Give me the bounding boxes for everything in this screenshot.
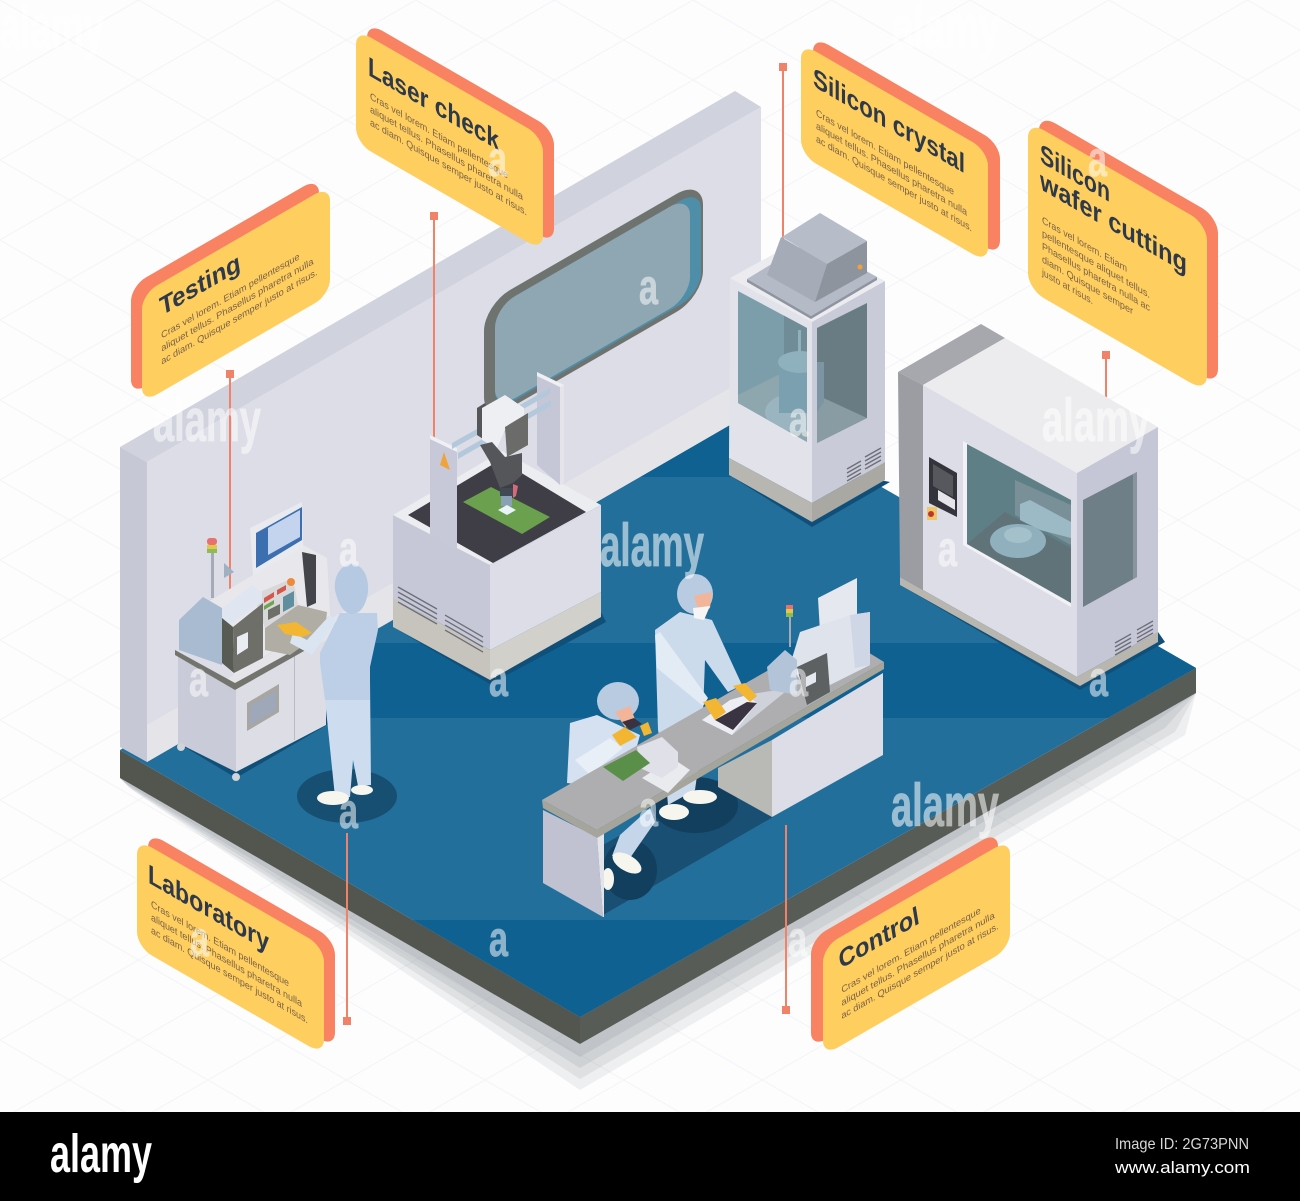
table machine [767, 578, 870, 705]
watermarks: a [788, 911, 808, 967]
card: Silicon wafer cutting: Silicon [1040, 139, 1110, 209]
card: Silicon crystal: ac diam. Quisque semper justo at risus. [816, 133, 972, 234]
watermarks: alamy [153, 387, 261, 454]
card: Testing [131, 178, 330, 403]
seated technician [567, 682, 655, 890]
card: Laser check: Laser check [368, 52, 500, 157]
standing technician [655, 574, 742, 820]
card: Laboratory: ac diam. Quisque semper justo at risus. [151, 925, 308, 1026]
table cabinet [718, 740, 772, 817]
back wall [120, 91, 761, 762]
card: Control: ac diam. Quisque semper justo at risus. [841, 922, 999, 1022]
watermarks: a [789, 651, 809, 707]
card: Laboratory: Cras vel lorem. Etiam pellentesque [151, 899, 289, 989]
watermarks: alamy [891, 772, 999, 839]
footer bar [0, 1112, 1300, 1201]
watermarks: a [639, 781, 659, 837]
footer bar: Image ID: 2G73PNN [1115, 1136, 1249, 1153]
watermarks: a [190, 911, 210, 967]
watermarks: a [339, 783, 359, 839]
watermarks [0, 0, 1150, 967]
watermarks: a [339, 521, 359, 577]
testing machine [175, 502, 332, 781]
watermarks: alamy [600, 512, 704, 579]
watermarks: a [938, 521, 958, 577]
card: Silicon crystal: Silicon crystal [813, 63, 965, 180]
card: Testing: aliquet tellus. Phasellus pharetra nulla [161, 257, 314, 354]
card: Silicon wafer cutting: Cras vel lorem. Etiam [1042, 215, 1127, 275]
card: Testing: ac diam. Quisque semper justo at risus. [161, 268, 318, 367]
laser check machine [393, 372, 606, 684]
footer bar: www.alamy.com [1114, 1158, 1250, 1177]
card: Laboratory: aliquet tellus. Phasellus pharetra nulla [151, 912, 302, 1010]
card: Control: Cras vel lorem. Etiam pellentesque [841, 906, 982, 996]
watermarks: a [789, 391, 809, 447]
card: Laboratory [137, 832, 335, 1055]
watermarks: a [488, 131, 508, 187]
card: Testing: Cras vel lorem. Etiam pellentesque [161, 252, 300, 341]
card: Laser check: ac diam. Quisque semper justo at risus. [370, 117, 527, 218]
card: Silicon crystal: aliquet tellus. Phasellus pharetra nulla [816, 120, 967, 219]
card: Testing: Testing [158, 247, 242, 321]
card: Silicon wafer cutting: pellentesque aliquet tellus. [1042, 228, 1150, 301]
card: Silicon wafer cutting: wafer cutting [1039, 165, 1187, 280]
card: Silicon crystal [801, 36, 1000, 263]
watermarks: a [1089, 651, 1109, 707]
silicon crystal cabinet [729, 213, 890, 527]
watermarks: a [1088, 131, 1108, 187]
card: Silicon wafer cutting [1028, 114, 1218, 392]
card: Laser check: Cras vel lorem. Etiam pellentesque [370, 91, 508, 181]
footer bar: alamy [50, 1124, 152, 1184]
card: Silicon wafer cutting: Phasellus pharetra nulla ac [1042, 241, 1150, 314]
silicon wafer cutting machine [898, 324, 1165, 690]
connector lines [226, 63, 1110, 589]
watermarks: alamy [1042, 387, 1150, 454]
card: Control [811, 831, 1010, 1056]
watermarks: a [489, 651, 509, 707]
card: Control: Control [836, 900, 921, 974]
card: Control: aliquet tellus. Phasellus pharetra nulla [841, 911, 995, 1009]
watermarks: a [489, 911, 509, 967]
table leg [543, 810, 603, 917]
floor platform [100, 390, 1200, 1044]
table top [542, 632, 884, 830]
watermarks: a [189, 651, 209, 707]
card: Silicon wafer cutting: justo at risus. [1041, 266, 1093, 307]
technician at testing machine [277, 564, 397, 823]
microscope and circuit board [603, 718, 690, 793]
floor shadow [120, 693, 1196, 1090]
card: Laboratory: Laboratory [148, 859, 270, 959]
card: Laser check [356, 22, 554, 251]
card: Silicon crystal: Cras vel lorem. Etiam pellentesque [816, 107, 954, 198]
connector lines bottom [343, 825, 790, 1025]
watermarks: a [639, 259, 659, 315]
control table with technicians [542, 574, 884, 917]
wall window [484, 179, 703, 423]
card: Laser check: aliquet tellus. Phasellus pharetra nulla [370, 104, 523, 203]
card: Silicon wafer cutting: diam. Quisque semper [1042, 254, 1133, 318]
laptop [702, 683, 790, 735]
